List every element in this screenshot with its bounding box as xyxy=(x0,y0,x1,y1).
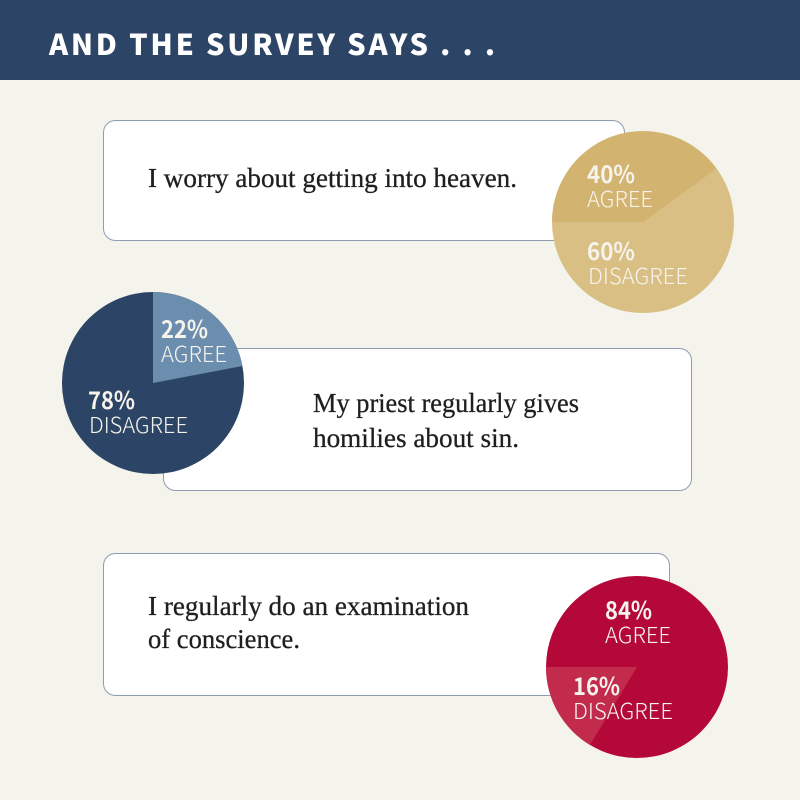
panel: heaven statement xyxy=(104,120,734,313)
statement: homilies: homilies about sin. xyxy=(313,423,519,453)
label: 16% disagree xyxy=(573,667,673,726)
label: 84% agree: 84% xyxy=(605,591,652,626)
statement: conscience: I regularly do an examination xyxy=(148,591,469,621)
pie chart: homilies xyxy=(62,292,244,474)
pie chart: conscience xyxy=(546,576,728,758)
label: 16% disagree: 16% xyxy=(573,667,620,702)
header banner xyxy=(0,0,800,80)
pie chart: heaven xyxy=(552,131,734,313)
statement: conscience: of conscience. xyxy=(148,624,300,654)
label: 16% disagree: DISAGREE xyxy=(573,694,673,726)
card: homilies xyxy=(164,348,692,490)
label: 84% agree: AGREE xyxy=(605,618,671,650)
label: 22% agree: 22% xyxy=(161,310,208,345)
label: 22% agree xyxy=(161,310,227,369)
label: 78% disagree xyxy=(88,381,188,440)
label: 84% agree xyxy=(605,591,671,650)
title: AND THE SURVEY SAYS . . . xyxy=(48,22,495,64)
label: 40% agree: 40% xyxy=(587,155,635,190)
statement: conscience xyxy=(148,591,469,654)
label: 60% disagree: 60% xyxy=(587,232,635,267)
panel: homilies statement xyxy=(62,292,692,490)
statement: homilies: My priest regularly gives xyxy=(313,388,579,418)
label: 40% agree: AGREE xyxy=(587,182,653,214)
statement: heaven: I worry about getting into heaven. xyxy=(148,163,517,193)
panel: conscience statement xyxy=(104,554,728,758)
statement: homilies xyxy=(313,388,579,453)
label: 40% agree xyxy=(587,155,653,214)
label: 60% disagree xyxy=(587,232,688,291)
label: 78% disagree: DISAGREE xyxy=(89,408,188,440)
label: 22% agree: AGREE xyxy=(161,337,227,369)
label: 78% disagree: 78% xyxy=(88,381,135,416)
card: conscience xyxy=(104,554,670,696)
label: 60% disagree: DISAGREE xyxy=(588,259,688,291)
card: heaven xyxy=(104,120,624,240)
